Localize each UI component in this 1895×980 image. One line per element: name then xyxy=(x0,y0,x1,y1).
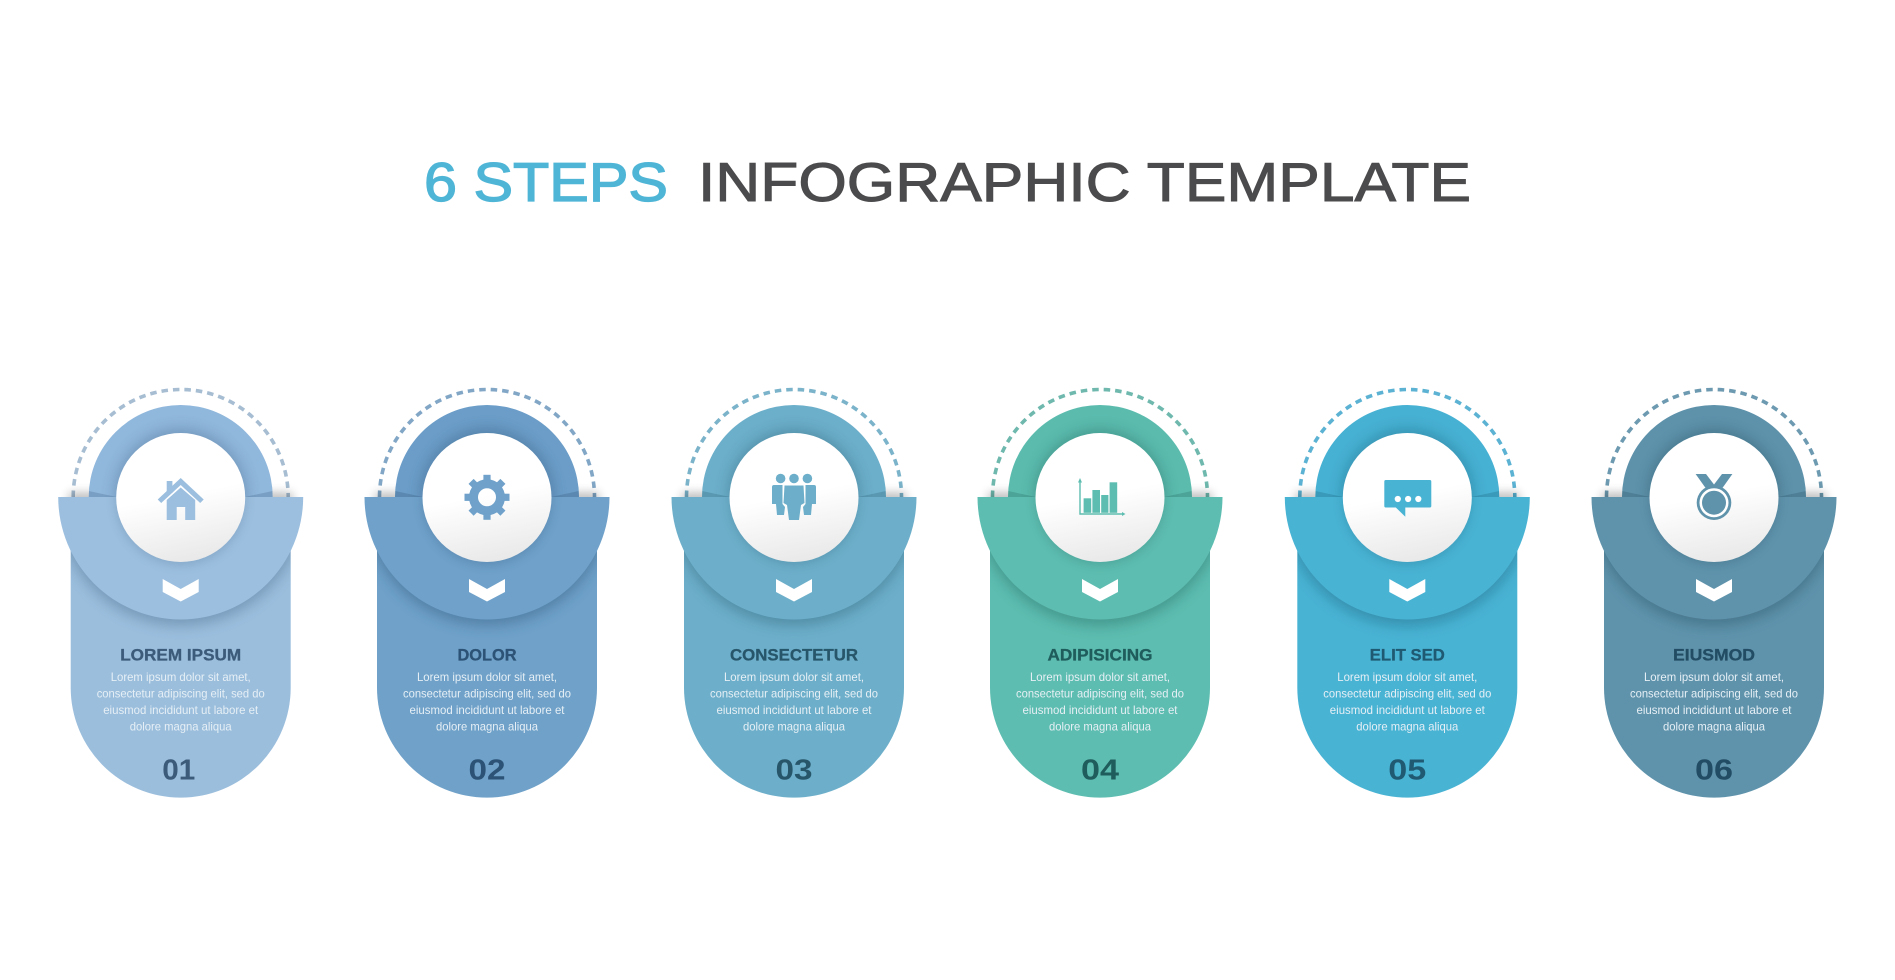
description xyxy=(710,670,878,734)
number: 05 xyxy=(1388,754,1426,786)
description xyxy=(1016,670,1184,734)
description: eiusmod incididunt ut labore et xyxy=(1636,703,1792,717)
description xyxy=(403,670,571,734)
description: Lorem ipsum dolor sit amet, xyxy=(1337,670,1477,684)
description xyxy=(1323,670,1492,734)
chevron xyxy=(1696,579,1732,602)
description: Lorem ipsum dolor sit amet, xyxy=(724,670,864,684)
chevron xyxy=(469,579,505,602)
heading: EIUSMOD xyxy=(1673,646,1755,664)
icon: people xyxy=(772,474,816,520)
white circle xyxy=(730,433,858,562)
description: dolore magna aliqua xyxy=(743,720,845,734)
panel: step 06 xyxy=(1592,390,1836,798)
description: eiusmod incididunt ut labore et xyxy=(410,703,565,717)
number: 03 xyxy=(776,754,812,786)
panel: step 02 xyxy=(364,390,610,798)
heading: LOREM IPSUM xyxy=(120,646,241,664)
title: 6 steps: 6 STEPS xyxy=(424,151,668,213)
white circle xyxy=(1036,433,1164,562)
description: consectetur adipiscing elit, sed do xyxy=(1016,686,1184,700)
description: dolore magna aliqua xyxy=(436,720,538,734)
description: eiusmod incididunt ut labore et xyxy=(716,703,872,717)
icon: bar chart xyxy=(1078,478,1126,516)
chevron xyxy=(163,579,199,602)
description: Lorem ipsum dolor sit amet, xyxy=(1644,670,1784,684)
description xyxy=(1630,670,1798,734)
description: dolore magna aliqua xyxy=(130,720,232,734)
icon: medal xyxy=(1696,474,1732,520)
white circle xyxy=(116,433,245,562)
description: dolore magna aliqua xyxy=(1049,720,1151,734)
icon: gear xyxy=(464,475,510,520)
panel: step 05 xyxy=(1285,390,1530,798)
number: 01 xyxy=(162,754,195,786)
chevron xyxy=(776,579,812,602)
number: 06 xyxy=(1695,754,1733,786)
description: dolore magna aliqua xyxy=(1356,720,1459,734)
description: consectetur adipiscing elit, sed do xyxy=(710,686,878,700)
description: eiusmod incididunt ut labore et xyxy=(1330,703,1485,717)
title: infographic template: INFOGRAPHIC TEMPLATE xyxy=(698,151,1471,213)
white circle xyxy=(422,433,552,562)
description: Lorem ipsum dolor sit amet, xyxy=(111,670,251,684)
number: 04 xyxy=(1081,754,1119,786)
heading: CONSECTETUR xyxy=(730,646,858,664)
description: dolore magna aliqua xyxy=(1663,720,1765,734)
chevron xyxy=(1082,579,1118,602)
white circle xyxy=(1650,433,1778,562)
icon: chat bubble xyxy=(1384,480,1431,517)
panel: step 03 xyxy=(672,390,916,798)
description: Lorem ipsum dolor sit amet, xyxy=(1030,670,1170,684)
description: eiusmod incididunt ut labore et xyxy=(1022,703,1178,717)
heading: DOLOR xyxy=(458,646,517,664)
description: Lorem ipsum dolor sit amet, xyxy=(417,670,557,684)
panel: step 01 xyxy=(58,390,303,798)
panel: step 04 xyxy=(978,390,1222,798)
icon: house xyxy=(158,478,204,520)
description: eiusmod incididunt ut labore et xyxy=(103,703,259,717)
heading: ELIT SED xyxy=(1370,646,1445,664)
chevron xyxy=(1389,579,1425,602)
title xyxy=(424,151,1471,213)
number: 02 xyxy=(468,754,506,786)
description: consectetur adipiscing elit, sed do xyxy=(1630,686,1798,700)
heading: ADIPISICING xyxy=(1048,646,1152,664)
description: consectetur adipiscing elit, sed do xyxy=(1323,686,1492,700)
description xyxy=(97,670,265,734)
description: consectetur adipiscing elit, sed do xyxy=(97,686,265,700)
description: consectetur adipiscing elit, sed do xyxy=(403,686,571,700)
white circle xyxy=(1343,433,1472,562)
